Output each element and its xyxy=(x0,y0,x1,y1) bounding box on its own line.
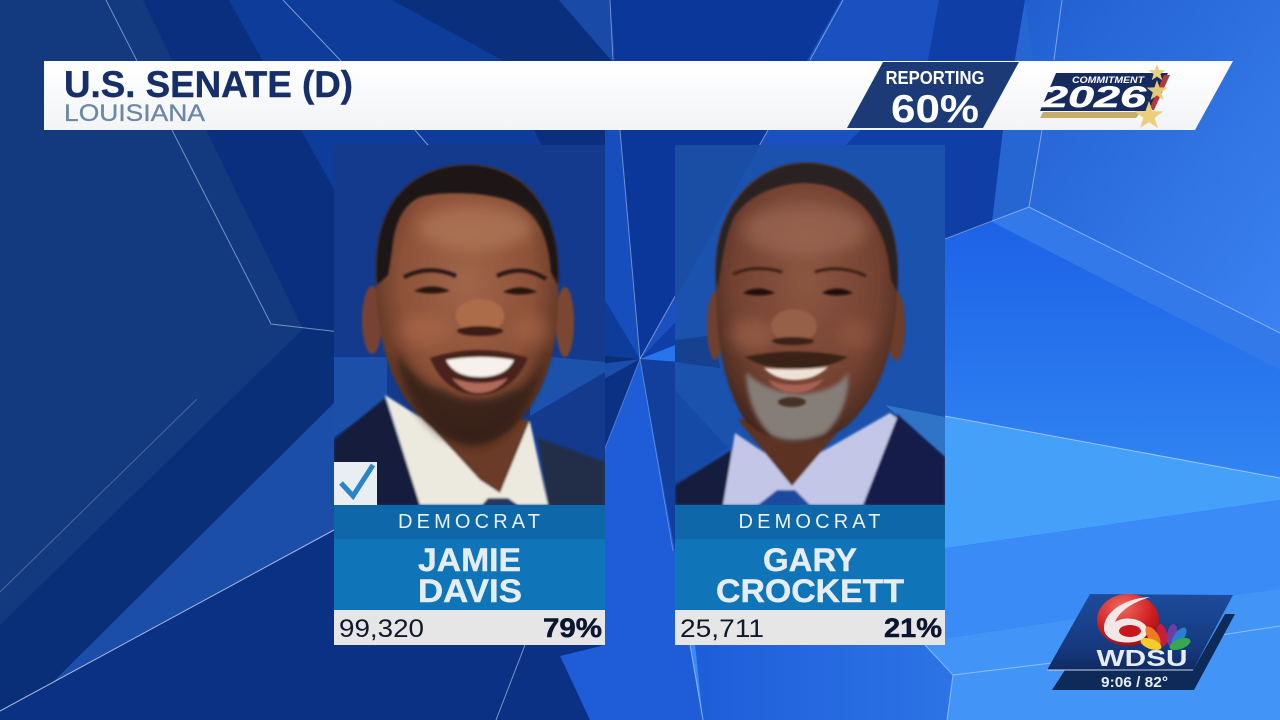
vote total row: 79% xyxy=(543,613,602,643)
reporting badge: REPORTING xyxy=(886,68,984,88)
reporting badge xyxy=(847,62,1019,131)
Commitment 2026 logo: 2026 xyxy=(1040,81,1146,114)
time and temperature: 9:06 / 82° xyxy=(1101,674,1168,691)
subtitle: LOUISIANA xyxy=(64,100,205,127)
candidate name xyxy=(675,539,945,610)
candidate name: GARY xyxy=(763,542,857,578)
beard xyxy=(395,345,550,447)
portrait: Gary Crockett xyxy=(675,163,945,505)
hair xyxy=(376,165,558,285)
hair xyxy=(716,163,898,292)
candidate panel: Gary Crockett xyxy=(675,145,945,645)
party label: DEMOCRAT xyxy=(738,511,880,533)
station name: WDSU xyxy=(1096,645,1188,671)
vote total row xyxy=(675,610,945,645)
top banner xyxy=(44,61,1233,131)
icon: peacock xyxy=(1139,623,1192,652)
candidate panel: Jamie Davis xyxy=(334,145,605,645)
reporting badge: 60% xyxy=(891,88,979,131)
goatee xyxy=(746,372,848,441)
candidate name: CROCKETT xyxy=(716,573,904,609)
candidate name: DAVIS xyxy=(418,573,522,609)
vote total row: 21% xyxy=(884,613,942,643)
WDSU station logo bug xyxy=(1047,594,1235,691)
icon: red circle with 6 xyxy=(1097,594,1159,646)
title: U.S. SENATE (D) xyxy=(64,64,353,105)
Commitment 2026 logo: COMMITMENT xyxy=(1072,75,1145,86)
vote total row xyxy=(334,610,605,645)
winner checkmark xyxy=(334,462,377,505)
candidate name xyxy=(334,539,605,610)
Commitment 2026 logo xyxy=(1040,64,1170,128)
vote total row: 25,711 xyxy=(680,615,764,643)
candidate name: JAMIE xyxy=(418,542,521,578)
portrait: Jamie Davis xyxy=(334,165,605,505)
vote total row: 99,320 xyxy=(339,615,424,643)
party label xyxy=(334,505,605,539)
party label xyxy=(675,505,945,539)
party label: DEMOCRAT xyxy=(398,511,540,533)
